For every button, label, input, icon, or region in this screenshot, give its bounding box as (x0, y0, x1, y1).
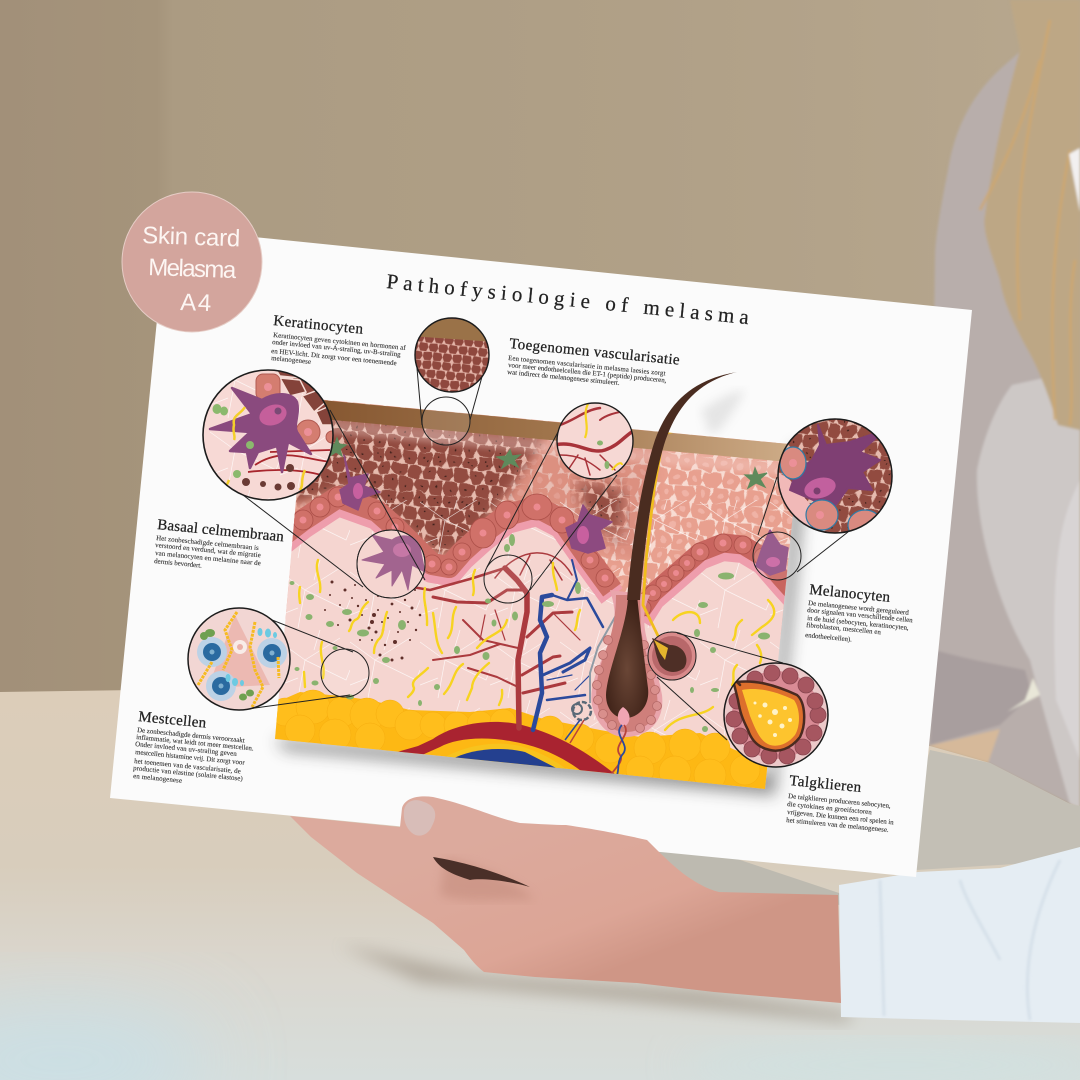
text block: Talgklieren: die cytokines en groeifactoren (787, 801, 873, 816)
connector lines (240, 355, 848, 740)
text block: Mestcellen: productie van elastine (solaire elastose) (133, 765, 243, 783)
text block: Keratinocyten: Keratinocyten geven cytokinen en hormonen af (273, 332, 407, 352)
stratum corneum (324, 400, 787, 462)
text block: Melanocyten: fibroblasten, mestcellen en (806, 622, 882, 636)
text block: Talgklieren: het stimuleren van de melanogenese. (786, 817, 889, 834)
text block: Basaal celmembraan: dermis bevordert. (154, 558, 203, 570)
nerve with knot (564, 616, 614, 744)
text block: Keratinocyten: melanogenese (271, 355, 311, 366)
text block: Keratinocyten: Keratinocyten (273, 313, 364, 338)
artery tree (400, 553, 580, 728)
magnifier: melanocyte between keratinocytes (777, 418, 893, 534)
collagen yellow fibres (299, 560, 774, 730)
text block: Mestcellen: inflammatie, wat leidt tot meer mestcellen. (136, 734, 254, 753)
hair shadow (700, 390, 745, 432)
magnifier: keratinocyte and melanocyte (202, 369, 334, 501)
text block: Talgklieren (786, 773, 895, 834)
hair follicle (591, 590, 662, 737)
melanin dots in dermis (324, 580, 424, 662)
text block: Mestcellen: Onder invloed van uv-straling geven (135, 741, 238, 758)
text block: Keratinocyten (271, 313, 407, 367)
green dendritic cells (328, 438, 767, 488)
text block: Melanocyten: in de huid (sebocyten, keratinocyten, (807, 615, 909, 632)
title: Pathofysiologie of melasma (386, 269, 751, 329)
card: white A4 sheet (110, 228, 972, 877)
hair shaft (627, 372, 737, 600)
epidermis: light keratinocytes (285, 395, 815, 640)
text block: Basaal celmembraan: van melanocyten en melanine naar de (155, 550, 261, 567)
source ring: sebaceous gland (648, 632, 696, 680)
twisted vessels at papilla (611, 724, 627, 774)
text block: Melanocyten: De melanogenese wordt gereguleerd (808, 600, 910, 617)
text block: Toegenomen vascularisatie (507, 336, 681, 387)
illustration: skin cross-section (270, 395, 815, 800)
source ring: blood vessels (484, 555, 532, 603)
thumbnail (404, 800, 435, 836)
background: table (0, 690, 1080, 1080)
text block: Keratinocyten: onder invloed van uv-A-straling, uv-B-straling (272, 339, 401, 359)
text block: Melanocyten: door signalen van verschillende cellen (807, 607, 914, 624)
text block: Basaal celmembraan (154, 517, 285, 570)
text block: Melanocyten (805, 582, 914, 644)
text block: Keratinocyten: en HEV-licht. Dit zorgt voor een toenemende (271, 348, 397, 367)
basal membrane right (644, 552, 787, 626)
basal cell layer (270, 487, 810, 616)
finger crease (433, 857, 530, 887)
sleeve (839, 847, 1080, 1023)
text block: Mestcellen: het toenemen van de vascularisatie, de (134, 758, 241, 775)
badge: Skin card Melasma A4: A4 (180, 289, 212, 317)
magnifier: stratum corneum (414, 317, 490, 393)
pale band below corneum (332, 420, 779, 476)
text block: Melanocyten: Melanocyten (809, 582, 891, 606)
badge: Skin card Melasma A4: Skin card (142, 222, 241, 252)
melanocytes (340, 455, 788, 575)
dermis (276, 518, 784, 789)
source ring: stratum corneum (422, 397, 470, 445)
text block: Talgklieren: Talgklieren (789, 773, 862, 796)
text block: Talgklieren: vrijgeven. Die kunnen een rol spelen in (787, 809, 895, 826)
magnifier: mast cells (188, 608, 290, 710)
text block: Toegenomen vascularisatie: Een toegenomen vascularisatie in melasma laesies zorgt (508, 355, 666, 377)
text block: Basaal celmembraan: Basaal celmembraan (157, 517, 285, 545)
finger shading (440, 858, 535, 901)
melanocyte nuclei (353, 483, 780, 567)
text block: Mestcellen: mestcellen histamine vrij. Dit zorgt voor (135, 749, 246, 767)
person: shirt and hair (928, 0, 1080, 808)
text block: Basaal celmembraan: verstoord en verdund, wat de migratie (155, 542, 261, 559)
vein tree (533, 560, 603, 730)
text block: Mestcellen: Mestcellen (138, 709, 207, 732)
magnifier: blood vessels (555, 403, 635, 479)
text block: Mestcellen (133, 709, 254, 785)
text block: Talgklieren: De talgklieren produceren sebocyten, (788, 793, 891, 810)
basal membrane (270, 503, 612, 596)
badge: Skin card Melasma A4 (122, 192, 262, 332)
source ring: melanocyte in basal layer (357, 530, 425, 598)
text block: Melanocyten: endotheelcellen). (805, 632, 853, 644)
text block: Toegenomen vascularisatie: voor meer endotheelcellen die ET-1 (peptide) produceren, (508, 362, 667, 385)
text block: Mestcellen: en melanogenese (133, 773, 182, 785)
text block: Toegenomen vascularisatie: wat indirect de melanogenese stimuleert. (507, 369, 620, 387)
hand holding card (290, 796, 841, 1003)
sebum yellow line (642, 432, 673, 637)
large blood vessel arc (397, 722, 620, 778)
background: wall (0, 0, 1080, 760)
epidermis: melasma dark cells (296, 420, 630, 555)
text block: Mestcellen: De zonbeschadigde dermis veroorzaakt (137, 727, 245, 745)
source ring: mast cell area (321, 649, 369, 697)
magnifier: sebaceous gland (724, 663, 828, 767)
badge: Skin card Melasma A4: Melasma (148, 254, 237, 284)
green cells (290, 534, 770, 732)
source ring: melanocyte right (753, 532, 801, 580)
text block: Basaal celmembraan: Het zonbeschadigde celmembraan is (156, 535, 259, 552)
text block: Toegenomen vascularisatie: Toegenomen vascularisatie (509, 336, 681, 369)
fat layer (275, 690, 768, 789)
illustration shadow (275, 445, 808, 795)
